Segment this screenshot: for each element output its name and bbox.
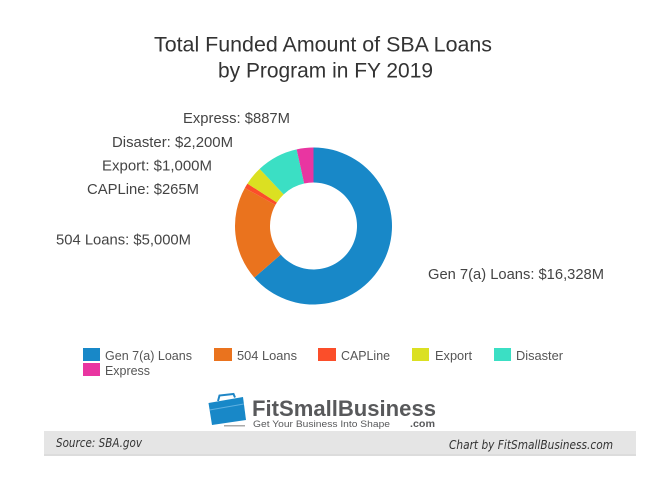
slice labels: Gen 7(a) Loans: $16,328M (428, 266, 604, 283)
slice: Express (297, 148, 314, 184)
slice: Gen 7(a) Loans (254, 148, 392, 304)
slice labels: Export: $1,000M (102, 158, 212, 174)
legend item: CAPLine: CAPLine (341, 348, 390, 363)
logo wordmark: FitSmallBusiness (252, 396, 436, 421)
legend (83, 348, 564, 378)
slice labels: CAPLine: $265M (87, 181, 199, 198)
slice labels (56, 110, 604, 283)
legend item: Express (83, 363, 150, 378)
title: Total Funded Amount of SBA Loans (154, 34, 492, 56)
slice: 504 Loans (235, 188, 281, 278)
logo .com: .com (410, 419, 435, 430)
legend item: 504 Loans: 504 Loans (237, 348, 297, 363)
slice labels: Express: $887M (183, 110, 290, 127)
legend item: Gen 7(a) Loans: Gen 7(a) Loans (105, 348, 192, 363)
slice labels: Disaster: $2,200M (112, 134, 233, 151)
logo tagline: Get Your Business Into Shape (253, 419, 390, 429)
legend item: Export: Export (435, 348, 472, 363)
chart credit: Chart by FitSmallBusiness.com (449, 438, 613, 452)
legend item: CAPLine (318, 348, 390, 363)
title (154, 34, 492, 82)
legend item: Express: Express (105, 363, 150, 378)
slice: Export (247, 169, 284, 202)
logo: FitSmallBusiness (208, 394, 436, 430)
slice: CAPLine (245, 184, 277, 205)
icon: briefcase (208, 394, 246, 426)
legend item: Disaster (494, 348, 564, 363)
source note: Source: SBA.gov (56, 436, 143, 450)
title: by Program in FY 2019 (218, 60, 433, 82)
donut chart (235, 148, 392, 304)
slice: Disaster (260, 149, 304, 194)
footer bar (44, 431, 636, 456)
legend item: Export (412, 348, 472, 363)
legend item: Disaster: Disaster (516, 348, 564, 363)
slice labels: 504 Loans: $5,000M (56, 232, 191, 248)
